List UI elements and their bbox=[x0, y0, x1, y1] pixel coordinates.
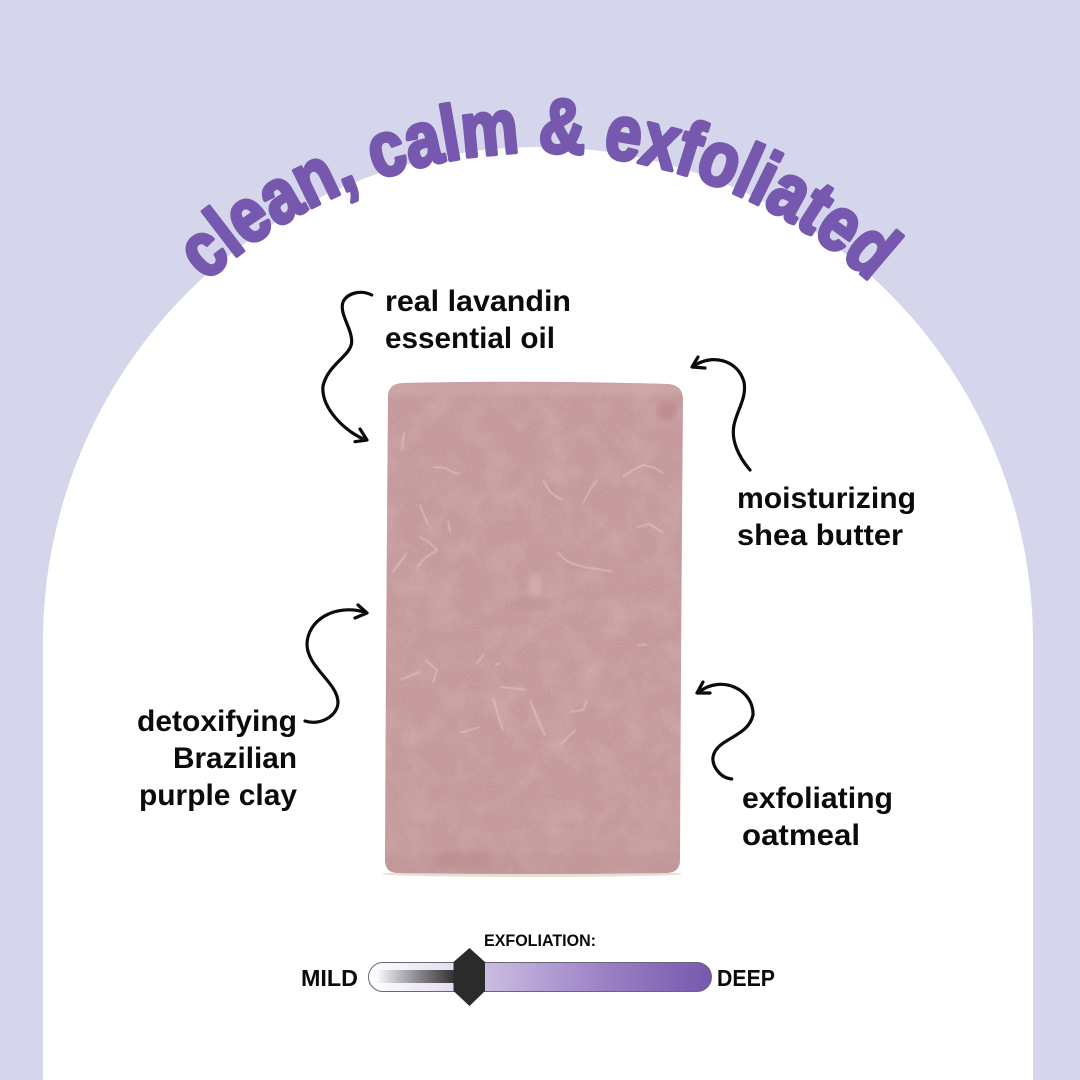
arrow: to soap lower right bbox=[697, 682, 753, 779]
callout: exfoliating oatmeal bbox=[697, 682, 893, 852]
arrow: to soap upper left bbox=[323, 292, 372, 442]
label: deep: DEEP bbox=[717, 965, 775, 991]
arrow: to soap lower left bbox=[305, 605, 367, 722]
title: curved heading: clean, calm & exfoliated bbox=[186, 98, 906, 281]
label bbox=[737, 482, 916, 552]
label: Brazilian bbox=[173, 742, 297, 775]
callout: real lavandin essential oil bbox=[323, 285, 571, 442]
dark fill bbox=[376, 970, 458, 983]
soap bar bbox=[380, 378, 690, 878]
label: purple clay bbox=[139, 779, 298, 812]
slider knob bbox=[454, 948, 485, 1006]
label: detoxifying bbox=[137, 705, 297, 738]
label bbox=[137, 705, 298, 812]
label: real lavandin bbox=[385, 285, 571, 318]
callout: detoxifying Brazilian purple clay bbox=[137, 605, 367, 812]
label: essential oil bbox=[385, 322, 555, 355]
label: mild: MILD bbox=[301, 965, 358, 991]
label: oatmeal bbox=[742, 819, 860, 852]
callout: moisturizing shea butter bbox=[692, 357, 916, 552]
arrow: to soap upper right bbox=[692, 357, 750, 470]
exfoliation slider bbox=[301, 932, 775, 1006]
label bbox=[742, 782, 893, 852]
gradient track bbox=[368, 962, 712, 992]
label bbox=[385, 285, 571, 355]
slider heading: EXFOLIATION: bbox=[484, 932, 596, 950]
label: exfoliating bbox=[742, 782, 893, 815]
label: shea butter bbox=[737, 519, 904, 552]
white arch panel bbox=[43, 147, 1033, 1080]
label: moisturizing bbox=[737, 482, 916, 515]
